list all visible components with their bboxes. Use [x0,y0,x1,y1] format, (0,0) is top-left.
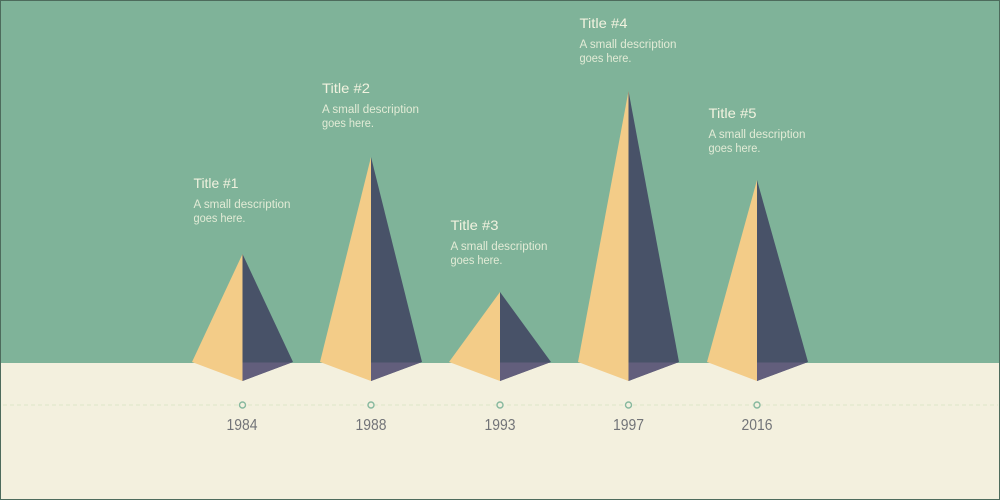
pyramid 2016 [707,180,808,381]
label: title 1: Title #1 [194,175,239,191]
pyramid 1993 [449,292,551,381]
year 1997: 1997 [613,417,644,434]
label: title 5: goes here. [708,143,760,155]
label: title 4 [580,15,676,65]
timeline marker 1997 [626,402,632,408]
pyramid 1988 [320,157,422,381]
label: title 2 [322,80,419,130]
pyramid 1984 [192,254,293,381]
label: title 5: Title #5 [708,105,757,121]
label: title 4: A small description [580,39,676,51]
label: title 4: Title #4 [580,15,628,31]
timeline marker 1993 [497,402,503,408]
year 1988: 1988 [356,417,387,434]
label: title 3 [450,217,548,267]
timeline marker 1984 [240,402,246,408]
timeline marker 1988 [368,402,374,408]
label: title 5 [708,105,806,155]
pyramid 1997 [578,91,679,381]
ground background [0,363,1000,500]
label: title 2: goes here. [322,118,374,130]
label: title 1: goes here. [194,213,246,225]
label: title 2: A small description [322,104,419,116]
label: title 5: A small description [708,129,806,141]
label: title 3: Title #3 [450,217,499,233]
label: title 2: Title #2 [322,80,370,96]
timeline dashed line [3,404,998,406]
year 1984: 1984 [226,417,258,434]
timeline marker 2016 [754,402,760,408]
label: title 3: A small description [450,241,548,253]
sky background [0,0,1000,363]
year 2016: 2016 [742,417,773,434]
label: title 4: goes here. [580,53,632,65]
year 1993: 1993 [484,417,516,434]
label: title 1 [194,175,290,225]
label: title 1: A small description [194,199,290,211]
label: title 3: goes here. [450,255,502,267]
